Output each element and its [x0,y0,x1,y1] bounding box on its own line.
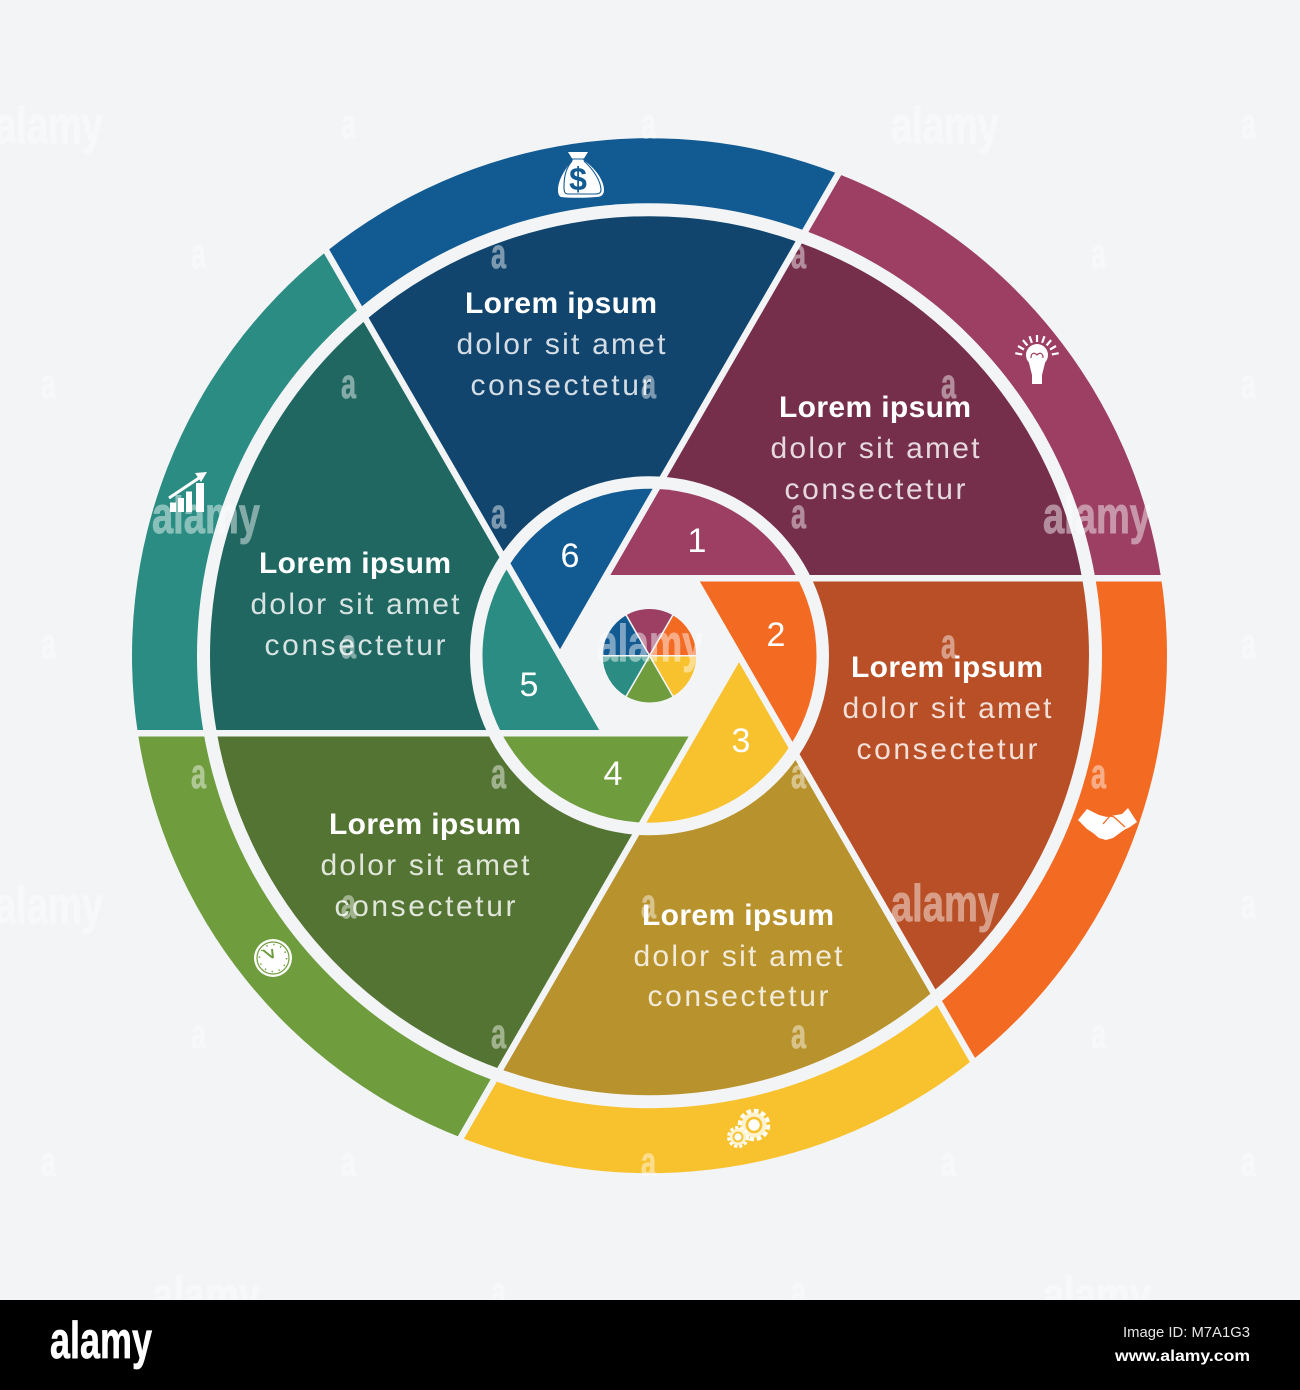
outer segment: teal [0,251,605,935]
number 6: 6 [561,537,579,575]
number 5: 5 [520,666,538,704]
watermarks: a [491,230,506,277]
watermarks: a [791,1268,806,1315]
outer segment: orange [694,376,1300,1060]
watermarks: a [341,100,356,147]
inner segment: orange [694,534,868,745]
watermarks: alamy [597,615,703,673]
watermarks: alamy [1043,487,1151,545]
icon: growth chart [169,472,207,512]
text block: blue panel: dolor sit amet [456,328,666,361]
text block: teal panel: consectetur [264,629,446,662]
text block: yellow panel: dolor sit amet [634,940,843,973]
watermarks: a [1241,1138,1256,1185]
outer segment: blue [210,0,838,656]
text block: blue panel [456,287,666,402]
watermarks: a [641,360,656,407]
number 3: 3 [732,722,750,760]
watermarks: a [791,750,806,797]
watermarks: a [491,750,506,797]
watermarks: alamy [891,97,999,155]
watermarks: a [41,1138,56,1185]
panel: dark magenta [605,242,1082,578]
watermarks: a [641,880,656,927]
text block: yellow panel: consectetur [648,980,828,1013]
panel: dark green [217,733,694,1069]
step numbers [520,522,785,793]
inner segment: teal [431,566,605,778]
watermarks: a [941,360,956,407]
footer bar [0,1300,1300,1390]
panel: dark orange [694,410,1224,992]
watermarks: alamy [891,875,999,933]
inner segment: magenta [605,489,797,578]
text block: yellow panel [634,899,843,1013]
outer segment: yellow [461,656,1089,1340]
image id: Image ID: M7A1G3 [1123,1324,1250,1341]
text block: teal panel [250,547,460,662]
icon: light bulb [1015,335,1059,384]
watermarks: a [1241,620,1256,667]
number 4: 4 [604,755,622,793]
icon: handshake [1078,808,1137,840]
inner ring of six numbered segments [431,444,868,867]
watermarks: a [1241,360,1256,407]
text block: blue panel: Lorem ipsum [465,287,657,320]
inner segment: blue [483,444,656,656]
text block: teal panel: Lorem ipsum [259,547,451,580]
text block: magenta panel: dolor sit amet [770,432,980,465]
text block: green panel: consectetur [334,890,516,923]
watermarks: a [1241,880,1256,927]
text block: magenta panel [770,391,980,506]
text block: orange panel: consectetur [856,733,1038,766]
panel: dark teal [75,320,605,901]
icon: money bag [558,152,604,198]
icon: money bag: $ [569,161,587,197]
watermarks: a [491,1010,506,1057]
text block: yellow panel: Lorem ipsum [642,899,834,932]
text block: green panel: Lorem ipsum [329,808,521,841]
watermarks: a [341,1138,356,1185]
text block: blue panel: consectetur [470,369,652,402]
watermarks: a [341,620,356,667]
icon: gears [728,1111,768,1146]
text block: orange panel: dolor sit amet [842,692,1052,725]
watermarks: a [191,750,206,797]
watermarks: a [491,1268,506,1315]
watermarks: a [641,1138,656,1185]
watermarks: a [791,230,806,277]
text block: magenta panel: Lorem ipsum [779,391,971,424]
watermarks: a [41,620,56,667]
watermarks: a [41,360,56,407]
watermarks: a [191,230,206,277]
text block: orange panel: Lorem ipsum [851,651,1043,684]
footer logo: alamy [50,1312,152,1370]
text block: green panel: dolor sit amet [320,849,530,882]
watermarks: a [491,490,506,537]
watermarks: a [791,1010,806,1057]
text block: green panel [320,808,530,923]
inner segment: green [502,733,694,823]
watermarks: a [191,1010,206,1057]
watermarks: alamy [152,487,260,545]
number 2: 2 [767,616,785,654]
watermarks: alamy [1043,1267,1151,1325]
watermarks: a [641,100,656,147]
text block: teal panel: dolor sit amet [250,588,460,621]
text block: magenta panel: consectetur [784,473,966,506]
watermarks: a [341,880,356,927]
outer segment: green [138,733,694,1138]
watermarks: a [1091,230,1106,277]
watermarks: a [1241,100,1256,147]
icon: clock [254,939,292,977]
central mini pie chart [602,608,697,703]
watermarks: a [1091,1010,1106,1057]
panel: dark blue [269,74,799,656]
panel: dark yellow [500,656,1030,1237]
watermarks: alamy [152,1267,260,1325]
text block: orange panel [842,651,1052,766]
number 1: 1 [688,522,706,560]
watermarks: a [341,360,356,407]
watermarks: a [791,490,806,537]
inner segment: yellow [643,656,816,867]
watermarks: a [941,620,956,667]
website: www.alamy.com [1114,1348,1250,1365]
watermarks: a [941,1138,956,1185]
middle ring of six dark panels [75,74,1224,1237]
watermarks: a [1091,750,1106,797]
outer segment: magenta [605,174,1161,578]
